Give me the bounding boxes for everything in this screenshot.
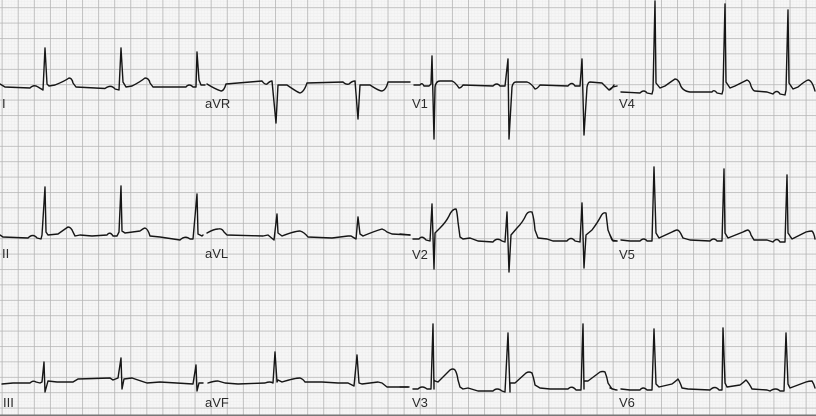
lead V3 xyxy=(400,324,617,410)
lead V5 xyxy=(610,167,815,262)
lead III xyxy=(2,358,203,410)
lead V2: V2 xyxy=(412,247,428,262)
lead aVF xyxy=(205,352,408,410)
lead aVF: aVF xyxy=(205,395,229,410)
lead aVR xyxy=(205,81,410,123)
lead V1 xyxy=(412,56,614,139)
lead V1: V1 xyxy=(412,96,428,111)
lead III: III xyxy=(3,395,14,410)
lead V4 xyxy=(610,1,815,111)
lead V6: V6 xyxy=(619,395,635,410)
lead I: I xyxy=(2,96,6,111)
lead V2 xyxy=(400,203,617,272)
lead aVL: aVL xyxy=(205,246,228,261)
lead aVR: aVR xyxy=(205,96,230,111)
lead V5: V5 xyxy=(619,247,635,262)
lead V4: V4 xyxy=(619,96,635,111)
lead II: II xyxy=(2,246,9,261)
lead aVL xyxy=(205,214,410,261)
lead V3: V3 xyxy=(412,395,428,410)
lead I xyxy=(0,48,205,111)
lead II xyxy=(0,186,203,261)
lead V6 xyxy=(610,328,815,410)
